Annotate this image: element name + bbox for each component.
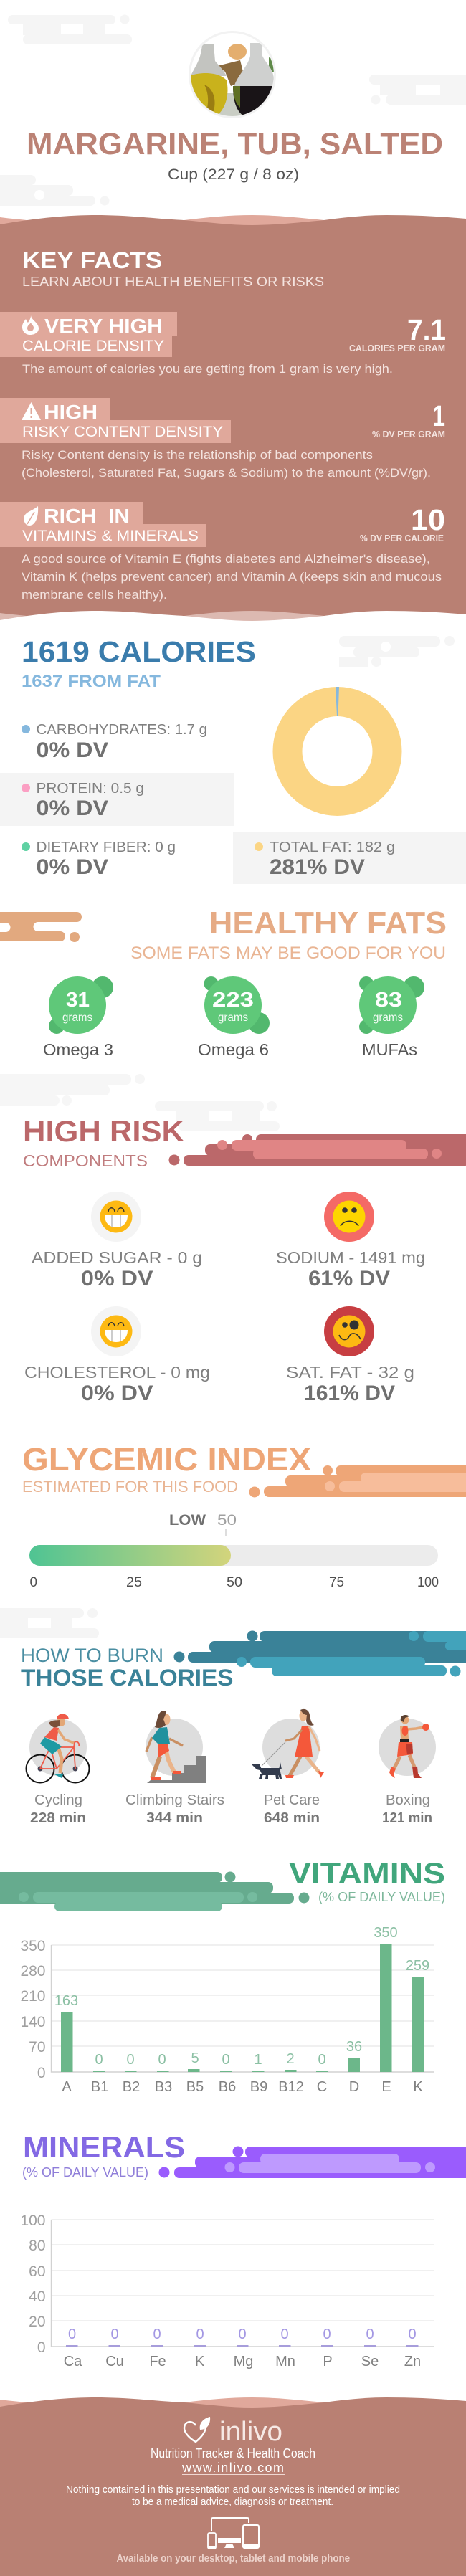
fact: vitamins and minerals: A good source of Vitamin E (fights diabetes and Alzheimer's disease),: [22, 552, 430, 566]
nutrient: dietary fiber: 0% DV: [36, 855, 108, 879]
fact: vitamins and minerals: Vitamin K (helps prevent cancer) and Vitamin A (keeps skin and mucous: [22, 570, 442, 584]
bar chart: vitamins: 163: [54, 1993, 78, 2009]
fact: calorie density: VERY HIGH: [44, 315, 163, 337]
nutrient: total fat: TOTAL FAT: 182 g: [270, 840, 395, 855]
bar chart: minerals: Se: [361, 2354, 379, 2370]
nutrient: protein: [0, 773, 234, 826]
bar chart: minerals: [20, 2213, 434, 2370]
activity: pet care: Pet Care: [264, 1792, 320, 1808]
glycemic index gauge: 100: [417, 1575, 439, 1590]
decorative clouds top: [0, 14, 466, 206]
activity: cycling: Cycling: [34, 1792, 82, 1808]
fat: omega 6: 223: [212, 989, 254, 1012]
risk: added sugar: ADDED SUGAR - 0 g: [32, 1248, 202, 1267]
nutrient: carbohydrates: CARBOHYDRATES: 1.7 g: [36, 722, 207, 738]
decorative band vitamins: [0, 1871, 310, 1911]
key facts subheading: LEARN ABOUT HEALTH BENEFITS OR RISKS: [22, 275, 324, 289]
bar chart: minerals: 0: [366, 2327, 374, 2342]
decorative band glycemic: [249, 1465, 466, 1497]
risk: saturated fat: SAT. FAT - 32 g: [286, 1363, 414, 1382]
activity: cycling: [26, 1714, 89, 1826]
bar chart: vitamins: E: [381, 2079, 391, 2095]
bar chart: vitamins: [20, 1925, 434, 2095]
serving size: Cup (227 g / 8 oz): [168, 166, 299, 183]
bar chart: minerals: 0: [37, 2339, 46, 2356]
fact: vitamins and minerals: RICH IN: [44, 505, 130, 527]
icon: inlivo heart logo: [184, 2417, 210, 2442]
fat: omega 6: [198, 976, 270, 1059]
disclaimer: [66, 2484, 400, 2508]
fact: risky content density: Risky Content density is the relationship of bad components: [22, 448, 373, 462]
bar chart: vitamins: B9: [250, 2079, 267, 2095]
fact: calorie density: [0, 312, 446, 376]
fat: omega 3: grams: [62, 1012, 92, 1024]
activity: boxing: 121 min: [382, 1810, 432, 1826]
disclaimer: Nothing contained in this presentation and our services is intended or implied: [66, 2484, 400, 2496]
bar chart: vitamins: A: [62, 2079, 72, 2095]
fact: calorie density: The amount of calories you are getting from 1 gram is very high.: [22, 362, 393, 376]
fact: vitamins and minerals: 10: [411, 503, 445, 536]
fact: vitamins and minerals: [0, 502, 445, 602]
bar chart: vitamins: D: [349, 2079, 359, 2095]
fat: omega 3: [43, 976, 113, 1059]
fat: omega 6: grams: [218, 1012, 248, 1024]
calories heading: 1619 CALORIES: [22, 635, 256, 668]
bar chart: vitamins: 350: [374, 1925, 398, 1941]
fat: omega 6: Omega 6: [198, 1040, 269, 1059]
fat: mufas: MUFAs: [362, 1040, 417, 1059]
brand name: inlivo: [219, 2417, 282, 2447]
risk: sodium: [276, 1192, 425, 1291]
glycemic index gauge: [29, 1512, 439, 1590]
fact: vitamins and minerals: VITAMINS & MINERALS: [22, 528, 199, 544]
risk: saturated fat: 161% DV: [304, 1382, 395, 1405]
bar chart: minerals: P: [323, 2354, 333, 2370]
bar chart: vitamins: 70: [29, 2039, 46, 2055]
burn heading: HOW TO BURN: [21, 1645, 163, 1666]
nutrient: total fat: 281% DV: [270, 855, 365, 879]
fact: risky content density: (Cholesterol, Saturated Fat, Sugars & Sodium) to the amount (%DV/gr).: [22, 466, 431, 480]
risk: cholesterol: 0% DV: [81, 1382, 153, 1405]
nutrient: dietary fiber: [22, 840, 176, 879]
bar chart: minerals: 0: [323, 2327, 331, 2342]
website: www.inlivo.com: [181, 2461, 284, 2475]
decorative cloud burn: [0, 1608, 99, 1638]
bar chart: vitamins: 280: [20, 1963, 46, 1979]
vitamins subheading: (% OF DAILY VALUE): [318, 1890, 445, 1904]
bar chart: vitamins: 36: [346, 2039, 362, 2055]
bar chart: vitamins: 0: [95, 2052, 103, 2068]
bar chart: vitamins: B3: [155, 2079, 172, 2095]
bar chart: vitamins: B1: [91, 2079, 108, 2095]
activity: climbing stairs: [125, 1711, 224, 1826]
fat: omega 3: Omega 3: [43, 1040, 113, 1059]
risk: sodium: SODIUM - 1491 mg: [276, 1248, 425, 1267]
burn heading: [21, 1645, 234, 1691]
healthy fats subheading: SOME FATS MAY BE GOOD FOR YOU: [130, 944, 446, 963]
healthy fats heading: HEALTHY FATS: [209, 906, 447, 941]
panel: key facts: [0, 215, 466, 635]
risk: cholesterol: CHOLESTEROL - 0 mg: [24, 1363, 210, 1382]
bar chart: vitamins: 0: [126, 2052, 135, 2068]
glycemic index gauge: 75: [329, 1575, 344, 1590]
bar chart: minerals: Cu: [105, 2354, 124, 2370]
fat: mufas: [359, 976, 424, 1059]
risk: cholesterol: [24, 1306, 210, 1405]
bar chart: minerals: 0: [408, 2327, 417, 2342]
bar chart: vitamins: 2: [286, 2051, 295, 2067]
bar chart: vitamins: 0: [318, 2052, 326, 2068]
tagline: Nutrition Tracker & Health Coach: [151, 2446, 315, 2461]
bar chart: vitamins: K: [413, 2079, 423, 2095]
bar chart: minerals: 0: [238, 2327, 247, 2342]
activity: boxing: Boxing: [386, 1792, 430, 1808]
bar chart: minerals: 0: [68, 2327, 76, 2342]
glycemic index subheading: ESTIMATED FOR THIS FOOD: [22, 1478, 238, 1496]
fat: omega 3: 31: [66, 989, 90, 1012]
activity: pet care: [252, 1709, 324, 1826]
bar chart: vitamins: 350: [20, 1938, 46, 1954]
nutrient: dietary fiber: DIETARY FIBER: 0 g: [36, 840, 176, 855]
decorative band burn: [173, 1630, 466, 1676]
burn heading: THOSE CALORIES: [21, 1665, 234, 1691]
bar chart: minerals: Ca: [64, 2354, 82, 2370]
bar chart: minerals: 80: [29, 2238, 46, 2254]
bar chart: vitamins: 1: [254, 2052, 262, 2068]
nutrient: carbohydrates: 0% DV: [36, 738, 108, 762]
panel: footer: [0, 2397, 466, 2576]
availability note: Available on your desktop, tablet and mobile phone: [116, 2552, 350, 2565]
bar chart: minerals: Mn: [275, 2354, 295, 2370]
bar chart: minerals: Fe: [149, 2354, 166, 2370]
minerals heading: MINERALS: [23, 2130, 185, 2164]
fact: calorie density: CALORIE DENSITY: [22, 338, 164, 354]
nutrient: protein: PROTEIN: 0.5 g: [36, 781, 144, 797]
fat: mufas: 83: [375, 989, 402, 1012]
high risk heading: HIGH RISK: [23, 1114, 184, 1148]
bar chart: vitamins: 5: [191, 2050, 199, 2066]
decorative band healthy fats: [0, 912, 82, 941]
fact: calorie density: 7.1: [407, 313, 446, 346]
glycemic index heading: GLYCEMIC INDEX: [22, 1441, 311, 1478]
bar chart: vitamins: 259: [406, 1958, 429, 1974]
icon: devices: [208, 2518, 259, 2549]
activity: boxing: [379, 1715, 436, 1826]
bar chart: minerals: 0: [196, 2327, 204, 2342]
bar chart: minerals: Zn: [404, 2354, 421, 2370]
risk: added sugar: 0% DV: [81, 1267, 153, 1291]
risk: sodium: 61% DV: [308, 1267, 390, 1291]
key facts heading: KEY FACTS: [22, 247, 162, 273]
bar chart: minerals: 100: [20, 2213, 46, 2229]
bar chart: vitamins: 210: [20, 1988, 46, 2005]
calories from fat: 1637 FROM FAT: [22, 672, 161, 691]
bar chart: minerals: 0: [110, 2327, 119, 2342]
glycemic index gauge: 0: [30, 1575, 37, 1590]
fact: risky content density: % DV PER GRAM: [372, 429, 445, 439]
activity: cycling: 228 min: [30, 1810, 86, 1826]
fat: mufas: grams: [373, 1012, 403, 1024]
decorative band minerals: [159, 2147, 466, 2178]
glycemic index gauge: 25: [126, 1575, 142, 1590]
bar chart: vitamins: C: [317, 2079, 327, 2095]
disclaimer: to be a medical advice, diagnosis or treatment.: [132, 2496, 333, 2508]
activity: pet care: 648 min: [264, 1810, 320, 1826]
bar chart: vitamins: 140: [20, 2014, 46, 2030]
bar chart: minerals: 60: [29, 2263, 46, 2280]
activity: climbing stairs: 344 min: [146, 1810, 203, 1826]
glycemic index gauge: 50: [217, 1512, 237, 1529]
bar chart: vitamins: 0: [158, 2052, 166, 2068]
nutrient: total fat: [233, 832, 466, 884]
glycemic index gauge: 50: [227, 1575, 242, 1590]
fact: vitamins and minerals: % DV PER CALORIE: [360, 533, 444, 543]
bar chart: vitamins: B5: [186, 2079, 204, 2095]
decorative clouds high risk: [0, 1074, 280, 1131]
fact: risky content density: HIGH: [44, 401, 98, 423]
bar chart: vitamins: B12: [278, 2079, 304, 2095]
bar chart: minerals: K: [195, 2354, 205, 2370]
donut chart: [287, 687, 387, 802]
bar chart: vitamins: B6: [219, 2079, 236, 2095]
nutrient: protein: 0% DV: [36, 797, 108, 820]
risk: added sugar: [32, 1192, 202, 1291]
bar chart: vitamins: 0: [37, 2065, 46, 2081]
minerals subheading: (% OF DAILY VALUE): [22, 2165, 148, 2180]
title: MARGARINE, TUB, SALTED: [27, 127, 443, 161]
glycemic index gauge: LOW: [169, 1512, 206, 1529]
fact: risky content density: RISKY CONTENT DENSITY: [22, 424, 223, 440]
risk: saturated fat: [286, 1306, 414, 1405]
bar chart: minerals: Mg: [234, 2354, 253, 2370]
fact: calorie density: CALORIES PER GRAM: [349, 343, 445, 353]
nutrient: carbohydrates: [22, 722, 207, 762]
fact: vitamins and minerals: membrane cells healthy).: [22, 588, 167, 602]
decorative band high risk: [169, 1134, 466, 1166]
activity: climbing stairs: Climbing Stairs: [125, 1792, 224, 1808]
food photo: oil bottles: [189, 31, 276, 118]
bar chart: minerals: 40: [29, 2289, 46, 2305]
high risk subheading: COMPONENTS: [23, 1151, 148, 1170]
bar chart: minerals: 0: [153, 2327, 161, 2342]
bar chart: minerals: 20: [29, 2314, 46, 2330]
decorative cloud calories: [339, 636, 455, 667]
fact: risky content density: 1: [432, 399, 445, 432]
bar chart: vitamins: 0: [222, 2052, 230, 2068]
vitamins heading: VITAMINS: [289, 1856, 445, 1890]
bar chart: vitamins: B2: [123, 2079, 140, 2095]
bar chart: minerals: 0: [280, 2327, 289, 2342]
fact: risky content density: [0, 398, 445, 480]
